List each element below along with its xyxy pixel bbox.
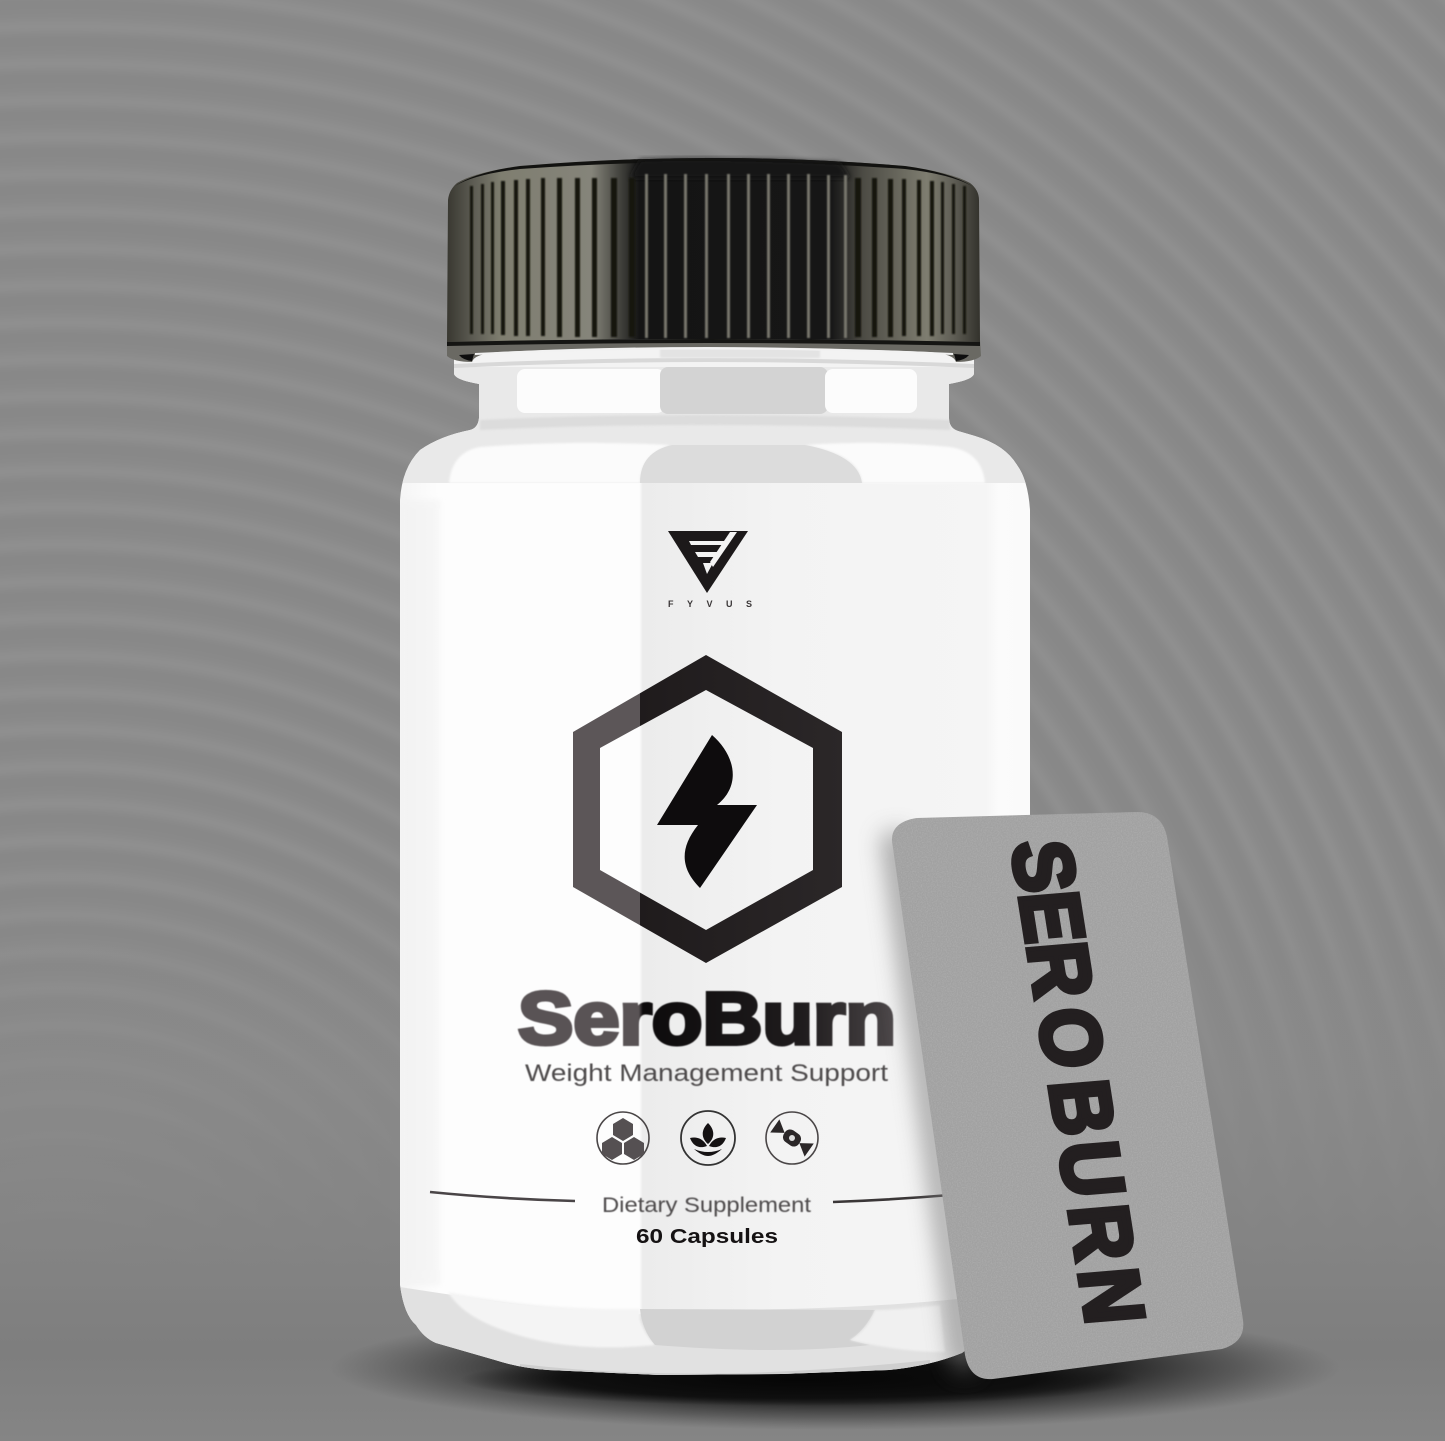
floor shadow bbox=[330, 1306, 1340, 1430]
card shape bbox=[892, 812, 1243, 1379]
subtitle: Weight Management Support bbox=[525, 1060, 888, 1087]
card texture bbox=[892, 812, 1243, 1379]
logo wordmark: FYVUS bbox=[668, 599, 752, 609]
icon: leaves bbox=[681, 1111, 735, 1165]
card shadow on bottle bbox=[882, 830, 975, 1370]
card wordmark: SEROBURN bbox=[992, 837, 1162, 1328]
capsule count: 60 Capsules bbox=[636, 1225, 778, 1248]
cap central dark top bbox=[630, 159, 850, 178]
product name: SeroBurn bbox=[518, 977, 896, 1060]
divider line right bbox=[833, 1195, 950, 1202]
icon: candy bbox=[766, 1112, 818, 1164]
leaning card bbox=[892, 812, 1243, 1379]
cap lip bbox=[447, 340, 981, 362]
cap shell bbox=[447, 158, 980, 342]
bottle cap bbox=[447, 158, 981, 362]
logo triangle mark bbox=[668, 531, 748, 593]
divider line left bbox=[430, 1192, 575, 1201]
bottle body and neck bbox=[390, 340, 1040, 1380]
supplement label: Dietary Supplement bbox=[602, 1194, 811, 1217]
bottle bbox=[390, 340, 1040, 1380]
FYVUS logo bbox=[668, 531, 752, 609]
hexagon emblem with lightning bolt bbox=[573, 655, 842, 963]
cap bottom edge bbox=[447, 339, 980, 346]
cap ribs light bbox=[645, 174, 847, 338]
cap top rim bbox=[455, 158, 972, 186]
icon: honeycomb bbox=[597, 1112, 649, 1164]
cap ribs dark bbox=[470, 178, 966, 337]
